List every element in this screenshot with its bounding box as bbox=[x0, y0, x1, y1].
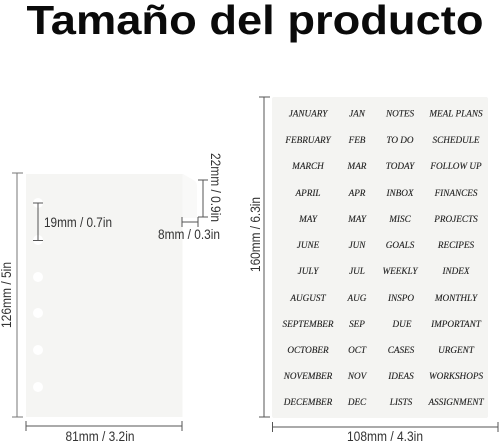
sticker labels grid: SCHEDULE bbox=[433, 135, 480, 145]
sticker labels grid: INSPO bbox=[387, 293, 414, 303]
sticker labels grid: IMPORTANT bbox=[430, 319, 482, 329]
dimension: sticker sheet width bbox=[272, 422, 498, 442]
sticker labels grid: MAR bbox=[347, 161, 367, 171]
sticker labels grid: NOVEMBER bbox=[283, 371, 333, 381]
sticker labels grid: FOLLOW UP bbox=[429, 161, 482, 171]
panel: divider sheet bbox=[26, 174, 197, 417]
sticker labels grid: FEBRUARY bbox=[284, 135, 332, 145]
sticker labels grid: AUG bbox=[347, 293, 367, 303]
sticker labels grid: INDEX bbox=[441, 266, 470, 276]
dimension: hole spacing: 19mm / 0.7in bbox=[44, 215, 112, 230]
sticker labels grid: DUE bbox=[392, 319, 412, 329]
sticker labels grid: MAY bbox=[347, 214, 367, 224]
dimension: sticker sheet height bbox=[248, 97, 270, 417]
sticker labels grid: MONTHLY bbox=[434, 293, 478, 303]
sticker labels grid: OCTOBER bbox=[287, 345, 329, 355]
sticker labels grid: JAN bbox=[349, 108, 366, 118]
sticker labels grid: TO DO bbox=[386, 135, 414, 145]
sticker labels grid: WORKSHOPS bbox=[429, 371, 483, 381]
sticker labels grid: MARCH bbox=[291, 161, 325, 171]
sticker labels grid: DEC bbox=[347, 397, 367, 407]
sticker labels grid: NOTES bbox=[385, 108, 414, 118]
panel: sticker sheet bbox=[272, 97, 488, 418]
sticker labels grid: OCT bbox=[348, 345, 367, 355]
sticker labels grid: SEPTEMBER bbox=[282, 319, 334, 329]
sticker labels grid: NOV bbox=[347, 371, 368, 381]
sticker labels grid: RECIPES bbox=[437, 240, 475, 250]
dimension: tab width: 8mm / 0.3in bbox=[158, 227, 220, 242]
sticker labels grid: FINANCES bbox=[434, 188, 478, 198]
sticker labels grid: DECEMBER bbox=[283, 397, 333, 407]
sticker labels grid: MISC bbox=[388, 214, 412, 224]
sticker labels grid: GOALS bbox=[386, 240, 415, 250]
sticker labels grid: JANUARY bbox=[289, 108, 328, 118]
dimension: tab height: 22mm / 0.9in bbox=[208, 153, 223, 222]
sticker labels grid: FEB bbox=[348, 135, 366, 145]
sticker labels grid: JUNE bbox=[297, 240, 320, 250]
dimension: hole spacing bbox=[33, 203, 112, 240]
sheet body bbox=[26, 174, 182, 417]
sticker labels grid: APRIL bbox=[294, 188, 321, 198]
sticker labels grid: WEEKLY bbox=[382, 266, 418, 276]
sticker labels grid: AUGUST bbox=[289, 293, 326, 303]
dimension: tab width bbox=[158, 217, 220, 242]
sticker labels grid: PROJECTS bbox=[433, 214, 478, 224]
sticker labels grid: INBOX bbox=[385, 188, 414, 198]
dimension: sheet width bbox=[26, 421, 182, 442]
sticker labels grid: ASSIGNMENT bbox=[427, 397, 484, 407]
sticker labels grid: LISTS bbox=[389, 397, 413, 407]
sticker labels grid: JULY bbox=[298, 266, 319, 276]
dimension: sticker sheet height: 160mm / 6.3in bbox=[248, 197, 263, 272]
sticker labels grid: MAY bbox=[298, 214, 318, 224]
sticker labels grid: JUN bbox=[349, 240, 366, 250]
sticker labels grid: SEP bbox=[349, 319, 365, 329]
sticker labels grid: TODAY bbox=[386, 161, 415, 171]
sticker labels grid: CASES bbox=[388, 345, 415, 355]
punched holes bbox=[33, 198, 43, 392]
sticker labels grid: JUL bbox=[349, 266, 365, 276]
sticker labels grid: APR bbox=[348, 188, 366, 198]
sticker labels grid: URGENT bbox=[438, 345, 475, 355]
sticker labels grid: IDEAS bbox=[387, 371, 414, 381]
dimension: tab height bbox=[198, 153, 223, 222]
sticker labels grid bbox=[282, 108, 484, 407]
sticker labels grid: MEAL PLANS bbox=[428, 108, 483, 118]
sheet tab bbox=[182, 174, 197, 218]
dimension: sheet height bbox=[0, 173, 23, 417]
